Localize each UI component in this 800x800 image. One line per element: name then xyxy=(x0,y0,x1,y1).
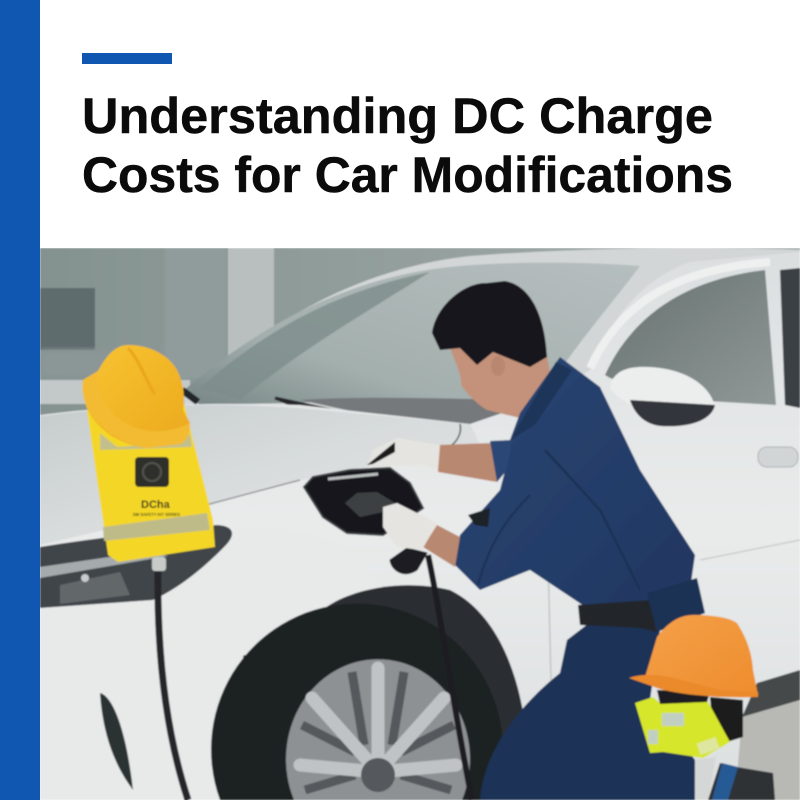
orange helmet with hi-vis neck cover xyxy=(629,615,758,758)
background: building xyxy=(40,248,800,418)
car: wheel xyxy=(211,585,525,800)
badge xyxy=(135,457,169,487)
boot xyxy=(695,757,775,800)
car: roof and windshield xyxy=(182,248,800,440)
charging port xyxy=(304,468,423,535)
ear xyxy=(492,356,504,376)
sidebar: blue stripe xyxy=(0,0,40,800)
sleeve cuff xyxy=(490,440,512,482)
hair xyxy=(432,281,547,367)
car: side body panel xyxy=(40,252,800,800)
hard hat xyxy=(82,345,190,448)
pouch label: DCha xyxy=(141,499,171,511)
charging cable from hand xyxy=(390,548,472,800)
car: lower bumper xyxy=(40,654,246,800)
title: Costs for Car Modifications xyxy=(82,147,733,203)
top glove xyxy=(368,438,440,470)
upper forearm xyxy=(438,443,497,482)
pouch small print: DM SAFETY KIT SERIES xyxy=(133,512,180,517)
car: side mirror xyxy=(610,367,715,426)
door pull xyxy=(468,508,490,527)
pouch xyxy=(87,400,215,562)
legs xyxy=(480,620,695,800)
bottom glove xyxy=(383,503,437,550)
title: Understanding DC Charge xyxy=(82,88,713,144)
hi-vis cover xyxy=(635,697,730,758)
photo: technician charging a white electric car xyxy=(40,248,800,800)
ground and car sill xyxy=(735,670,800,800)
lower forearm xyxy=(423,525,460,567)
car: door handle xyxy=(758,447,798,467)
jacket xyxy=(455,357,695,610)
title accent bar xyxy=(82,53,172,64)
yellow charging pouch with hard hat xyxy=(82,345,215,800)
car: headlight xyxy=(40,525,232,608)
belt xyxy=(578,600,657,632)
helmet shell xyxy=(645,615,758,697)
neck and face xyxy=(450,347,550,418)
cable xyxy=(158,570,188,800)
technician xyxy=(367,281,705,800)
car: side window xyxy=(590,262,800,408)
earpiece xyxy=(710,697,743,742)
title xyxy=(82,88,733,203)
